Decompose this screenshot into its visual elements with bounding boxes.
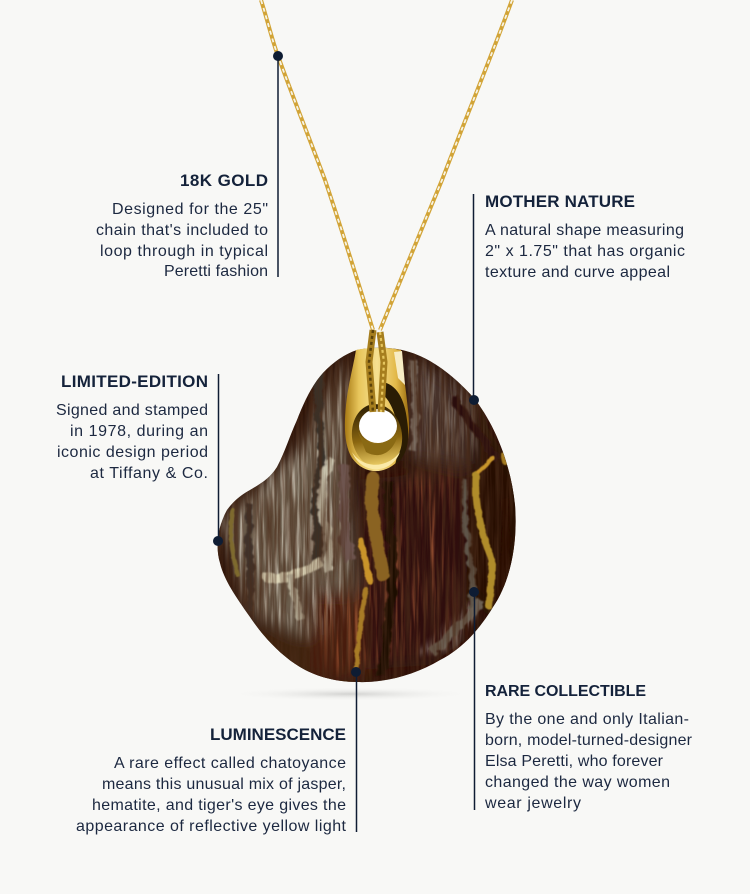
callout: rare collectible: By the one and only Italian- <box>485 711 689 728</box>
callout: 18K gold: loop through in typical <box>100 243 268 260</box>
gold bail <box>345 348 409 471</box>
callout: limited edition: iconic design period <box>57 444 208 461</box>
callout: 18K gold: Designed for the 25" <box>112 201 268 218</box>
callout: limited edition: LIMITED-EDITION <box>61 372 208 391</box>
callout: rare collectible <box>469 587 693 812</box>
callout: luminescence: hematite, and tiger's eye gives the <box>92 797 346 814</box>
gold chain <box>261 0 512 330</box>
callout: 18K gold: Peretti fashion <box>164 263 268 280</box>
tiger eye bands <box>231 455 505 672</box>
callout: rare collectible: Elsa Peretti, who forever <box>485 753 664 770</box>
callout: mother nature: texture and curve appeal <box>485 264 670 281</box>
callout: mother nature: MOTHER NATURE <box>485 192 635 211</box>
callout: 18K gold <box>96 51 283 280</box>
grain overlays <box>220 357 488 658</box>
callout: rare collectible: changed the way women <box>485 774 670 791</box>
bail opening <box>348 401 406 471</box>
stone grain texture <box>210 340 525 690</box>
callout: rare collectible: RARE COLLECTIBLE <box>485 683 646 700</box>
callout: luminescence: A rare effect called chatoyance <box>114 755 346 772</box>
pendant shadow <box>225 687 475 701</box>
callout: limited edition: at Tiffany & Co. <box>90 465 208 482</box>
callout: limited edition: Signed and stamped <box>56 402 208 419</box>
callout: luminescence <box>76 667 361 835</box>
stone pendant <box>210 340 525 690</box>
callout: limited edition <box>56 372 223 546</box>
callout: rare collectible: wear jewelry <box>484 795 581 812</box>
callout: luminescence: LUMINESCENCE <box>210 725 346 744</box>
callout: limited edition: in 1978, during an <box>70 423 208 440</box>
chain loops through bail <box>369 330 384 412</box>
callout: luminescence: means this unusual mix of jasper, <box>102 776 346 793</box>
callout: rare collectible: born, model-turned-designer <box>485 732 693 749</box>
callout: mother nature: 2" x 1.75" that has organic <box>485 243 685 260</box>
callout: luminescence: appearance of reflective yellow light <box>76 818 347 835</box>
callout: mother nature: A natural shape measuring <box>485 222 684 239</box>
callout: 18K gold: chain that's included to <box>96 222 268 239</box>
callout: mother nature <box>469 192 685 405</box>
callout: 18K gold: 18K GOLD <box>180 171 268 190</box>
